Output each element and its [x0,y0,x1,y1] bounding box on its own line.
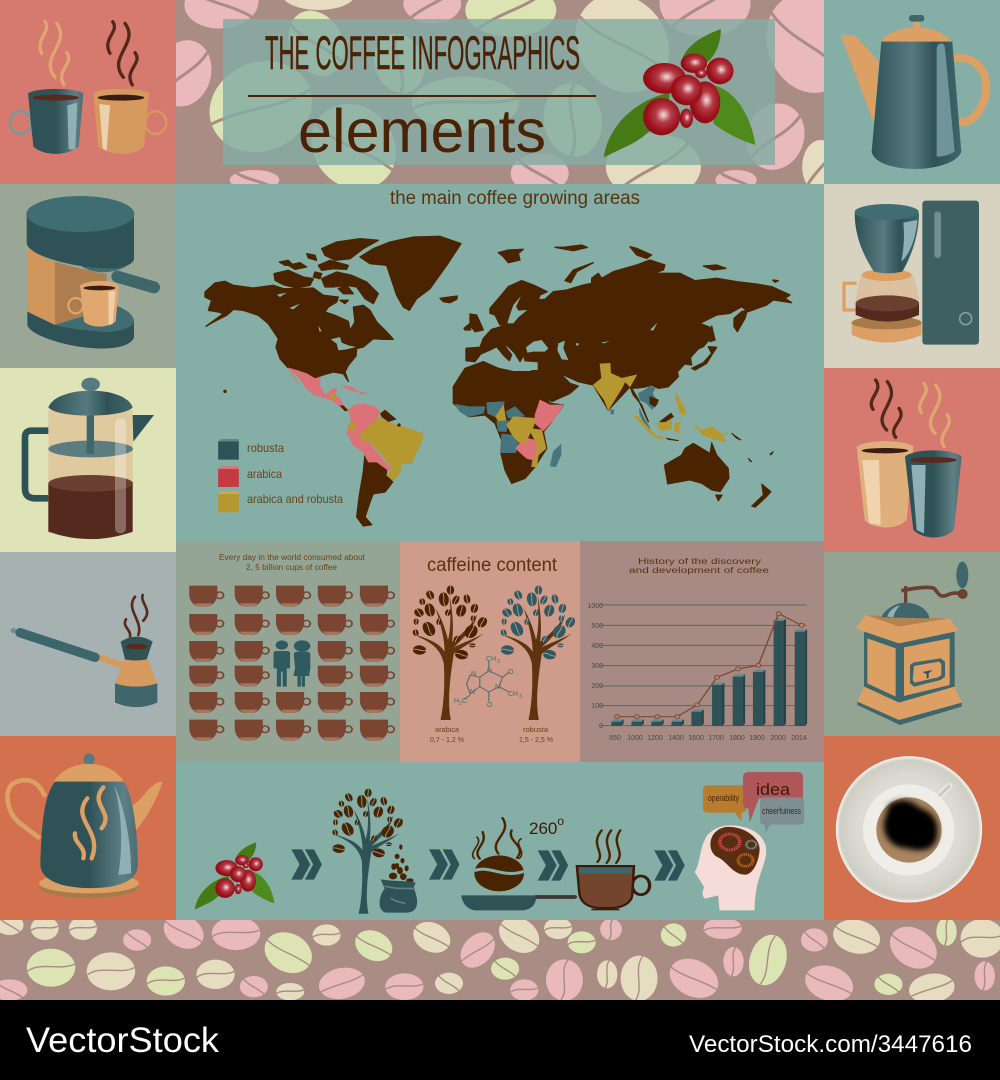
map heading: the main coffee growing areas [390,188,640,209]
x axis labels: 1000 [627,735,643,742]
panel: process flow [176,762,824,920]
legend: robusta [247,441,284,455]
caffeine molecule: CH [508,691,518,698]
x axis labels: 1200 [647,735,663,742]
panel: cups with steam [0,0,176,184]
panel: caffeine content [400,541,580,762]
process labels [529,780,801,838]
cups grid [189,586,394,741]
panel: turkish coffee pot [0,552,176,736]
panel: bottom bean pattern [0,913,1000,1006]
tree labels: 1,5 - 2,5 % [519,735,553,744]
process labels: o [557,814,564,828]
panel: espresso machine [0,184,176,368]
Africa, South Asia and Oceania [453,362,773,507]
caffeine molecule: CH [486,656,496,663]
icon: brewed coffee cup [577,830,650,910]
arrow: roasting to cup [538,850,568,881]
arrow: cup to head [654,850,685,881]
process labels: operability [708,793,739,803]
icon: tan mug [93,89,166,154]
Americas [205,236,461,526]
panel: two tall cups with steam [824,368,1000,552]
process labels: 260 [529,819,557,838]
legend [218,439,343,512]
caffeine molecule: 3 [519,694,522,700]
y axis labels: 400 [591,643,603,650]
caffeine molecule: 3 [459,701,462,707]
icon: roasting bean in pan [461,818,575,910]
icon: coffee berries [195,842,274,910]
icon: speech bubbles [703,772,804,834]
caffeine molecule [454,656,522,709]
panel: top-down cup on saucer [824,736,1000,920]
x axis labels [609,735,807,742]
world map [205,236,792,526]
process labels: idea [756,780,791,799]
x axis labels: 2014 [791,735,807,742]
x axis labels: 850 [609,735,621,742]
footer logo: VectorStock [26,1021,220,1060]
tree labels [430,725,553,744]
icon: robusta tree [500,585,577,720]
x axis labels: 1600 [688,735,704,742]
y axis labels: 100 [591,703,603,710]
caffeine molecule: N [487,668,492,675]
x axis labels: 1800 [729,735,745,742]
panel: header banner: THE COFFEE INFOGRAPHICS [265,26,580,79]
caffeine molecule: O [508,669,514,676]
panel: history chart [580,541,824,762]
y axis labels: 500 [591,623,603,630]
consumption heading: Every day in the world consumed about [219,553,366,562]
panel: drip coffee maker [824,184,1000,368]
footer url: VectorStock.com/3447616 [689,1031,972,1058]
caffeine molecule: N [495,684,500,691]
x axis labels: 1400 [668,735,684,742]
Eurasia [440,245,792,422]
icon: teal mug [10,89,83,154]
panel: kettle [0,736,176,920]
consumption heading [219,553,366,572]
caffeine molecule: C [462,698,467,705]
x axis labels: 2000 [770,735,786,742]
chart heading: and development of coffee [629,566,770,575]
tree labels: 0,7 - 1,2 % [430,735,464,744]
panel: french press [0,368,176,552]
y axis labels: 200 [591,683,603,690]
footer bar [0,1000,1000,1080]
icon: sack of beans [380,844,417,913]
caffeine molecule: N [471,671,476,678]
icon: arabica tree [412,585,489,720]
x axis labels: 1900 [749,735,765,742]
icon: coffee berries on leaves [604,29,755,157]
legend: arabica and robusta [247,492,343,506]
caffeine molecule: N [470,689,475,696]
translucent title plate [223,19,775,165]
icon: man and woman [274,640,310,687]
panel: coffee pot [824,0,1000,184]
bar and line chart [587,603,807,742]
caffeine molecule: O [487,702,493,709]
process labels: cheerfulness [762,806,801,816]
panel: coffee grinder [824,552,1000,736]
legend: arabica [247,467,282,481]
arrow: tree to roasting [429,849,460,880]
caffeine heading: caffeine content [427,555,558,576]
panel: world map [176,184,824,542]
caffeine molecule: H [454,698,459,705]
chart heading [629,557,770,575]
title divider [248,95,596,97]
y axis labels: 0 [599,723,603,730]
panel: daily consumption [176,541,400,762]
icon: coffee tree [332,788,405,914]
y axis labels: 1000 [587,603,603,610]
icon: dark steam [108,22,137,85]
header bean pattern [152,0,860,200]
icon: head with gears [695,825,766,910]
consumption heading: 2, 5 billion cups of coffee [246,563,338,572]
y axis labels [587,603,603,730]
caffeine molecule: 3 [497,659,500,665]
x axis labels: 1700 [708,735,724,742]
icon: tan steam [40,22,69,85]
arrow: berries to tree [291,849,322,880]
tree labels: robusta [523,725,549,734]
y axis labels: 300 [591,663,603,670]
chart heading: History of the discovery [638,557,761,566]
tree labels: arabica [435,725,460,734]
panel: header banner [152,0,860,200]
title line two: elements [298,97,546,165]
